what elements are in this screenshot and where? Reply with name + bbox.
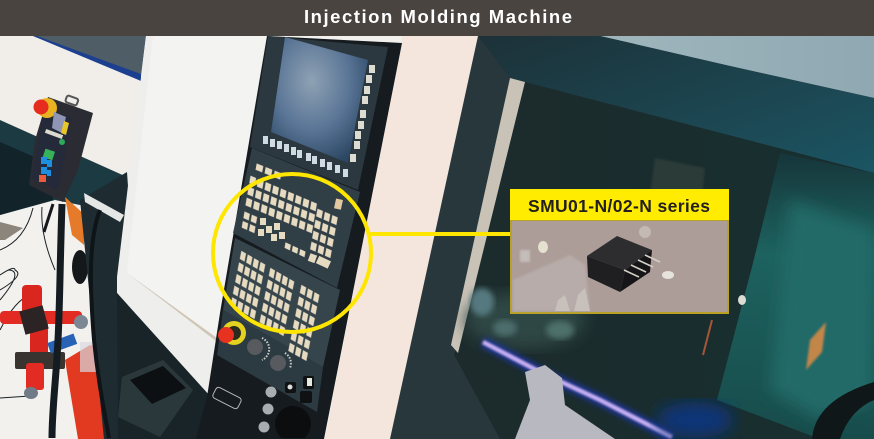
title: Injection Molding Machine bbox=[304, 6, 572, 27]
machine window bbox=[451, 78, 874, 439]
beige machine panel bbox=[325, 36, 478, 439]
callout heading: SMU01-N/02-N series bbox=[528, 196, 710, 216]
screen side keys bbox=[350, 65, 375, 162]
dark machine column and cables bbox=[44, 172, 132, 439]
handheld pendant controller bbox=[29, 95, 93, 202]
white machine door bbox=[117, 36, 268, 400]
highlight circle bbox=[213, 174, 371, 332]
keypad panel lower bbox=[223, 238, 340, 367]
keypad panel upper bbox=[233, 148, 360, 288]
black tray under door bbox=[117, 293, 210, 439]
callout: product bbox=[510, 189, 729, 313]
handle slot bbox=[212, 386, 242, 410]
callout body bbox=[511, 220, 728, 313]
screen bezel bbox=[250, 36, 388, 190]
round gray buttons bbox=[258, 386, 276, 432]
CNC control panel bbox=[196, 36, 402, 439]
left background: table and floor bbox=[0, 36, 146, 398]
callout reflections bbox=[513, 226, 674, 311]
rotary dials bbox=[247, 338, 291, 371]
red connectors and fire extinguisher bbox=[0, 285, 120, 439]
small square buttons bbox=[285, 376, 314, 403]
display screen bbox=[271, 37, 368, 163]
callout connector line bbox=[370, 232, 512, 236]
jog wheel bbox=[275, 406, 311, 438]
keys upper keypad bbox=[241, 162, 343, 269]
lower control strip bbox=[217, 310, 323, 412]
screen bottom keys bbox=[263, 136, 348, 177]
dark machine frame and top band bbox=[390, 36, 874, 439]
keys lower keypad bbox=[230, 249, 321, 364]
product module image bbox=[587, 236, 660, 292]
top title bar bbox=[0, 0, 874, 36]
callout heading bar bbox=[510, 189, 729, 220]
emergency stop button bbox=[218, 321, 246, 345]
